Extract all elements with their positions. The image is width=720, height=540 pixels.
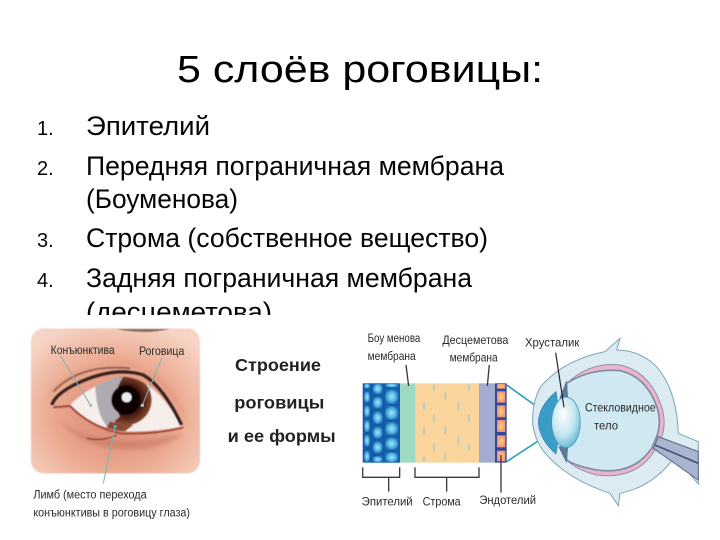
- Bowman membrane layer: [400, 383, 416, 463]
- item 4: (десцеметова): [86, 297, 272, 327]
- heading: structure of the cornea: Строение: [235, 355, 321, 375]
- label: limbus: конъюнктивы в роговицу глаза): [33, 507, 190, 520]
- white image backdrop clipping last list line: [0, 315, 720, 540]
- label: vitreous body: [585, 402, 656, 433]
- label: Descemet membrane: Десцеметова: [442, 334, 509, 347]
- label: vitreous body: Стекловидное: [585, 402, 656, 415]
- optic nerve: [653, 437, 698, 480]
- pink choroid: [567, 365, 664, 476]
- heading: structure of the cornea: роговицы: [234, 393, 324, 413]
- item 1: Эпителий: [86, 111, 210, 141]
- label: cornea: Роговица: [139, 345, 185, 358]
- photo of eye: [31, 328, 200, 473]
- panel: eye cross-section: [507, 336, 698, 506]
- pointer lines: [60, 355, 162, 483]
- label: limbus: Лимб (место перехода: [33, 488, 147, 501]
- panel: eye photo: [31, 328, 336, 520]
- label: Bowman membrane: Боу менова: [368, 332, 421, 345]
- cornea: [538, 392, 559, 454]
- label: epithelium: Эпителий: [362, 495, 413, 508]
- connector lines to layers diagram: [507, 385, 541, 462]
- stroma layer: [416, 383, 479, 463]
- item 1: 1.: [37, 118, 54, 140]
- item 4: 4.: [37, 270, 54, 292]
- item 2: Передняя пограничная мембрана: [86, 151, 505, 181]
- item 2: [37, 151, 505, 214]
- item 4: Задняя пограничная мембрана: [86, 263, 473, 293]
- sclera: [533, 338, 698, 506]
- label: conjunctiva: Конъюнктива: [51, 344, 115, 357]
- label lines and brackets: [363, 365, 501, 493]
- ciliary body: [558, 380, 568, 463]
- item 3: 3.: [37, 230, 54, 252]
- item 2: 2.: [37, 158, 54, 180]
- label: Descemet membrane: [442, 334, 509, 364]
- item 4: [37, 263, 473, 327]
- label: Bowman membrane: мембрана: [368, 350, 416, 363]
- label: Descemet membrane: мембрана: [450, 351, 498, 364]
- label: vitreous body: тело: [594, 420, 618, 433]
- label: stroma: Строма: [423, 496, 461, 509]
- item 2: (Боуменова): [86, 184, 238, 214]
- label line: lens: [556, 353, 564, 407]
- endothelium layer: [495, 383, 507, 463]
- title: 5 слоёв роговицы:: [177, 49, 543, 91]
- vitreous body: [567, 370, 659, 471]
- label: limbus: [33, 488, 190, 520]
- item 3: Строма (собственное вещество): [86, 223, 488, 253]
- epithelium layer: [363, 383, 400, 463]
- lens: [552, 397, 580, 448]
- Descemet membrane layer: [479, 383, 495, 463]
- heading: structure of the cornea: [228, 355, 336, 446]
- numbered list of corneal layers: [37, 111, 505, 327]
- label: Bowman membrane: [368, 332, 421, 363]
- panel: corneal layers diagram: [362, 332, 536, 509]
- label: lens: Хрусталик: [525, 336, 580, 349]
- label: endothelium: Эндотелий: [479, 494, 536, 507]
- heading: structure of the cornea: и ее формы: [228, 426, 336, 446]
